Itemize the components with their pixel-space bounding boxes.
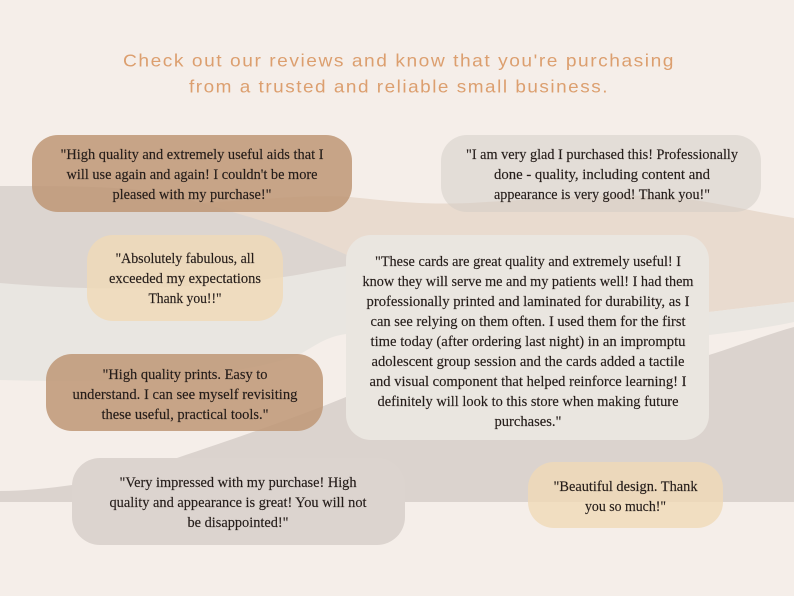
review card: absolutely fabulous: exceeded my expectations [109, 271, 261, 287]
review card: very impressed [72, 458, 405, 545]
heading: from a trusted and reliable small business. [189, 76, 609, 96]
review card: beautiful design [528, 462, 723, 528]
review card: long review about cards: adolescent group session and the cards added a tactile [372, 354, 685, 370]
review card: high quality aids [32, 135, 352, 212]
review card: absolutely fabulous: "Absolutely fabulous, all [116, 251, 254, 267]
review card: beautiful design: you so much!" [585, 499, 666, 515]
review card: very impressed: be disappointed!" [188, 515, 288, 531]
review card: very glad: "I am very glad I purchased this! Professionally [466, 147, 738, 163]
review card: long review about cards [346, 235, 709, 440]
review card: long review about cards: and visual component that helped reinforce learning! I [370, 374, 686, 390]
review card: long review about cards: "These cards are great quality and extremely useful! I [375, 254, 681, 270]
review card: beautiful design: "Beautiful design. Thank [554, 479, 698, 495]
review card: very impressed: quality and appearance is great! You will not [110, 495, 367, 511]
review card: absolutely fabulous [87, 235, 283, 321]
review card: high quality aids: pleased with my purchase!" [112, 187, 272, 203]
background: grey wave [0, 186, 400, 288]
review card: high quality aids: "High quality and extremely useful aids that I [60, 147, 324, 163]
review card: long review about cards: purchases." [494, 414, 562, 430]
review card: long review about cards: know they will serve me and my patients well! I had them [362, 274, 694, 290]
review card: very glad [441, 135, 761, 212]
review card: high quality aids: will use again and again! I couldn't be more [66, 167, 318, 183]
review card: very glad: done - quality, including content and [494, 167, 710, 183]
review card: very glad: appearance is very good! Thank you!" [494, 187, 710, 203]
review card: long review about cards: professionally printed and laminated for durability, as I [366, 294, 690, 310]
review card: high quality prints: "High quality prints. Easy to [102, 367, 268, 383]
review card: absolutely fabulous: Thank you!!" [148, 291, 222, 307]
heading [123, 50, 675, 96]
review card: very impressed: "Very impressed with my purchase! High [120, 475, 357, 491]
background: light wave [0, 262, 794, 381]
background: dark wave [0, 327, 794, 502]
review card: long review about cards: can see relying on them often. I used them for the first [370, 314, 686, 330]
review card: long review about cards: definitely will look to this store when making future [378, 394, 679, 410]
review card: high quality prints: understand. I can see myself revisiting [72, 387, 298, 403]
review card: high quality prints [46, 354, 323, 431]
review card: high quality prints: these useful, practical tools." [102, 407, 268, 423]
background: peach wave [200, 195, 794, 325]
review card: long review about cards: time today (after ordering last night) in an impromptu [370, 334, 686, 350]
heading: Check out our reviews and know that you're purchasing [123, 50, 675, 70]
